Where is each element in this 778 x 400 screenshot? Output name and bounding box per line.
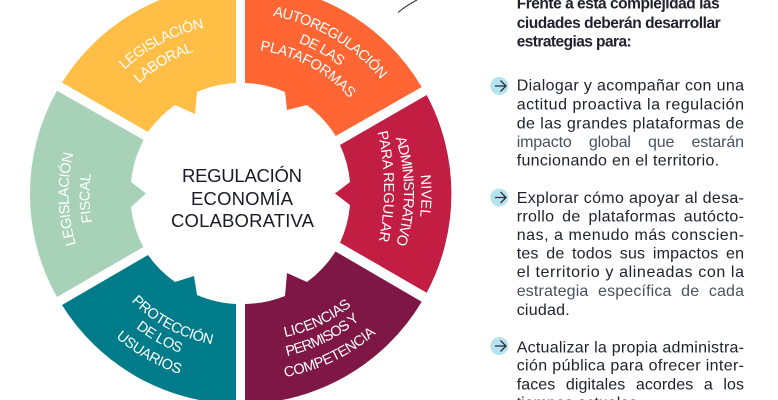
panel: legislación fiscal segment <box>30 90 146 297</box>
bullet 2 text: estrategia específica de cada <box>517 283 744 300</box>
panel: licencias permisos y competencia segment: PERMISOS Y <box>286 312 356 356</box>
panel: licencias permisos y competencia segment: COMPETENCIA <box>284 328 376 376</box>
bullet 1 text: Dialogar y acompañar con una <box>517 78 744 95</box>
panel: nivel administrativo para regular segment <box>335 95 452 293</box>
bullet 3 text: Actualizar la propia administra- <box>517 339 744 356</box>
bullet 1 text: funcionando en el territorio. <box>517 153 719 170</box>
bullet 2 text <box>517 190 744 319</box>
icon: arrow in circle <box>490 77 508 95</box>
decorative curved line <box>398 0 417 12</box>
panel: nivel administrativo para regular segment: ADMINISTRATIVO <box>396 138 414 246</box>
bullet 2 text: rrollo de plataformas autócto- <box>517 209 744 226</box>
panel: autorregulación de las plataformas segment: PLATAFORMAS <box>261 40 356 97</box>
bullet 1 <box>490 77 744 170</box>
panel: legislación laboral segment <box>62 0 236 132</box>
panel: protección de los usuarios segment <box>62 255 236 400</box>
bullet 1 text: de las grandes plataformas de <box>517 116 744 132</box>
center title: ECONOMÍA <box>191 188 294 209</box>
panel: protección de los usuarios segment: DE LOS <box>136 320 182 352</box>
intro text: estrategias para: <box>517 34 632 51</box>
icon: arrow in circle <box>490 188 508 206</box>
center title: COLABORATIVA <box>171 210 315 231</box>
bullet 3 <box>490 337 744 400</box>
panel: autorregulación de las plataformas segment <box>245 0 422 136</box>
panel: legislación laboral segment: LEGISLACIÓN <box>118 18 203 69</box>
bullet 1 text: impacto global que estarán <box>517 134 744 151</box>
bullet 1 text <box>517 78 744 170</box>
bullet 2 text: el territorio y alineadas con la <box>517 264 744 281</box>
panel: legislación fiscal segment: LEGISLACIÓN <box>58 152 76 246</box>
bullet 2 text: Explorar cómo apoyar al desa- <box>517 190 744 207</box>
center title: REGULACIÓN <box>182 165 302 186</box>
bullet 2 text: ciudad. <box>517 302 570 319</box>
intro text <box>517 0 721 51</box>
center title <box>171 165 315 231</box>
bullet 3 text: ción pública para ofrecer inter- <box>517 358 744 375</box>
panel: protección de los usuarios segment: USUARIOS <box>118 330 182 373</box>
bullet 2 text: nas, a menudo más conscien- <box>517 227 744 244</box>
intro text: ciudades deberán desarrollar <box>517 15 721 32</box>
bullet 1 text: actitud proactiva la regulación <box>517 96 744 114</box>
bullet 2 <box>490 188 744 319</box>
panel: legislación fiscal segment: FISCAL <box>79 174 92 223</box>
panel: licencias permisos y competencia segment: LICENCIAS <box>284 300 350 337</box>
panel: autorregulación de las plataformas segment: AUTOREGULACIÓN <box>272 7 388 79</box>
panel: nivel administrativo para regular segment: NIVEL <box>420 175 432 216</box>
bullet 2 text: tes de todos sus impactos en <box>517 245 744 262</box>
panel: autorregulación de las plataformas segment: DE LAS <box>300 34 344 65</box>
panel: licencias permisos y competencia segment <box>245 252 422 400</box>
bullet 3 text: faces digitales acordes a los <box>517 376 744 393</box>
panel: legislación laboral segment: LABORAL <box>133 44 194 83</box>
panel: nivel administrativo para regular segment: PARA REGULAR <box>378 131 394 242</box>
panel: protección de los usuarios segment: PROTECCIÓN <box>132 294 214 344</box>
bullet 3 text <box>517 339 744 400</box>
icon: arrow in circle <box>490 337 508 355</box>
